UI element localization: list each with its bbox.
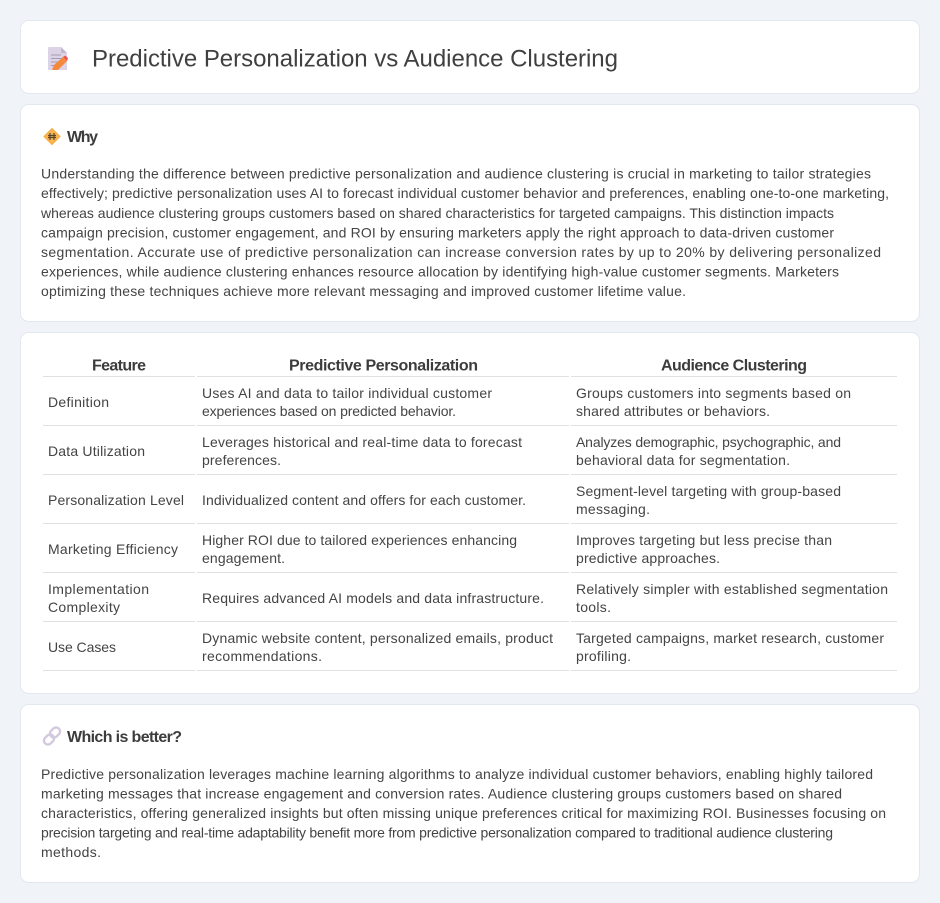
- row: marketing efficiency: engagement.: [202, 550, 285, 566]
- row: definition: Groups customers into segments based on: [576, 385, 851, 401]
- row: personalization level: [48, 483, 841, 517]
- row: marketing efficiency: predictive approaches.: [576, 550, 720, 566]
- row: marketing efficiency: [48, 532, 832, 566]
- row: use cases: Use Cases: [48, 639, 116, 655]
- panel: why: [20, 104, 920, 322]
- text block: which paragraph: Predictive personalization leverages machine learning algorithms to analyze individual customer behaviors, enabling highly tailored: [41, 766, 873, 782]
- heading: why: Why: [67, 129, 98, 146]
- row: implementation complexity: Relatively simpler with established segmentation: [576, 581, 888, 597]
- row: marketing efficiency: Improves targeting but less precise than: [576, 532, 832, 548]
- row: data utilization: preferences.: [202, 452, 281, 468]
- text block: why paragraph: campaign precision, customer engagement, and ROI by ensuring marketers apply the right approach to data-driven customer: [41, 224, 834, 240]
- text block: why paragraph: effectively; predictive personalization uses AI to forecast individual customer behavior and preferences, enabling one-to-one marketing,: [41, 185, 889, 201]
- table header row: Audience Clustering: [661, 358, 807, 374]
- text block: why paragraph: optimizing these techniques achieve more relevant messaging and improved customer lifetime value.: [41, 283, 686, 299]
- row: data utilization: Analyzes demographic, psychographic, and: [576, 434, 841, 450]
- row: data utilization: behavioral data for segmentation.: [576, 452, 790, 468]
- row: personalization level: Segment-level targeting with group-based: [576, 483, 841, 499]
- row: implementation complexity: [48, 581, 888, 615]
- text block: why paragraph: whereas audience clustering groups customers based on shared characteristics for targeted campaigns. This distinction impacts: [40, 205, 834, 221]
- row: data utilization: Data Utilization: [48, 443, 145, 459]
- text block: why paragraph: segmentation. Accurate use of predictive personalization can increase conversion rates by up to 20% by delivering personalized: [41, 244, 881, 260]
- row: definition: shared attributes or behaviors.: [576, 403, 770, 419]
- icon: link: [42, 726, 62, 746]
- row: personalization level: Individualized content and offers for each customer.: [202, 492, 526, 508]
- row: implementation complexity: Requires advanced AI models and data infrastructure.: [202, 590, 544, 606]
- heading: which is better: Which is better?: [67, 729, 182, 746]
- row: definition: Uses AI and data to tailor individual customer: [202, 385, 492, 401]
- panel: comparison table: [20, 332, 920, 694]
- row: definition: [48, 385, 851, 419]
- icon: memo document with pencil: [48, 47, 68, 70]
- row: definition: experiences based on predicted behavior.: [202, 403, 456, 419]
- row: implementation complexity: Complexity: [48, 599, 120, 615]
- row: data utilization: Leverages historical and real-time data to forecast: [202, 434, 522, 450]
- row: implementation complexity: Implementation: [48, 581, 149, 597]
- text block: which paragraph: characteristics, offering generalized insights but often missing unique preferences critical for maximizing ROI. Businesses focusing on: [41, 805, 886, 821]
- panel: title header: [20, 20, 920, 94]
- table header row: Predictive Personalization: [289, 358, 478, 374]
- text block: why paragraph: experiences, while audience clustering enhances resource allocation by identifying high-value customer segments. Marketers: [41, 264, 839, 280]
- row: implementation complexity: tools.: [576, 599, 611, 615]
- icon: orange diamond: [44, 128, 60, 144]
- text block: which paragraph: precision targeting and real-time adaptability benefit more from predictive personalization compared to traditional audience clustering: [41, 824, 833, 840]
- row: personalization level: Personalization Level: [48, 492, 184, 508]
- row: use cases: Dynamic website content, personalized emails, product: [202, 630, 553, 646]
- text block: why paragraph: Understanding the difference between predictive personalization and audience clustering is crucial in marketing to tailor strategies: [41, 166, 871, 182]
- row: marketing efficiency: Marketing Efficiency: [48, 541, 178, 557]
- panel: which is better: [20, 704, 920, 882]
- table header row: [92, 358, 807, 374]
- row: personalization level: messaging.: [576, 501, 650, 517]
- title: Predictive Personalization vs Audience Clustering: [92, 46, 618, 72]
- row: use cases: Targeted campaigns, market research, customer: [576, 630, 884, 646]
- row: use cases: [48, 630, 884, 664]
- row: marketing efficiency: Higher ROI due to tailored experiences enhancing: [202, 532, 517, 548]
- text block: which paragraph: [41, 766, 886, 860]
- table header row: Feature: [92, 358, 146, 374]
- text block: which paragraph: marketing messages that increase engagement and conversion rates. Audience clustering groups customers based on shared: [41, 786, 842, 802]
- text block: why paragraph: [40, 166, 889, 299]
- text block: which paragraph: methods.: [41, 844, 101, 860]
- row: use cases: profiling.: [576, 648, 631, 664]
- row: data utilization: [48, 434, 841, 468]
- row: use cases: recommendations.: [202, 648, 322, 664]
- row: definition: Definition: [48, 394, 109, 410]
